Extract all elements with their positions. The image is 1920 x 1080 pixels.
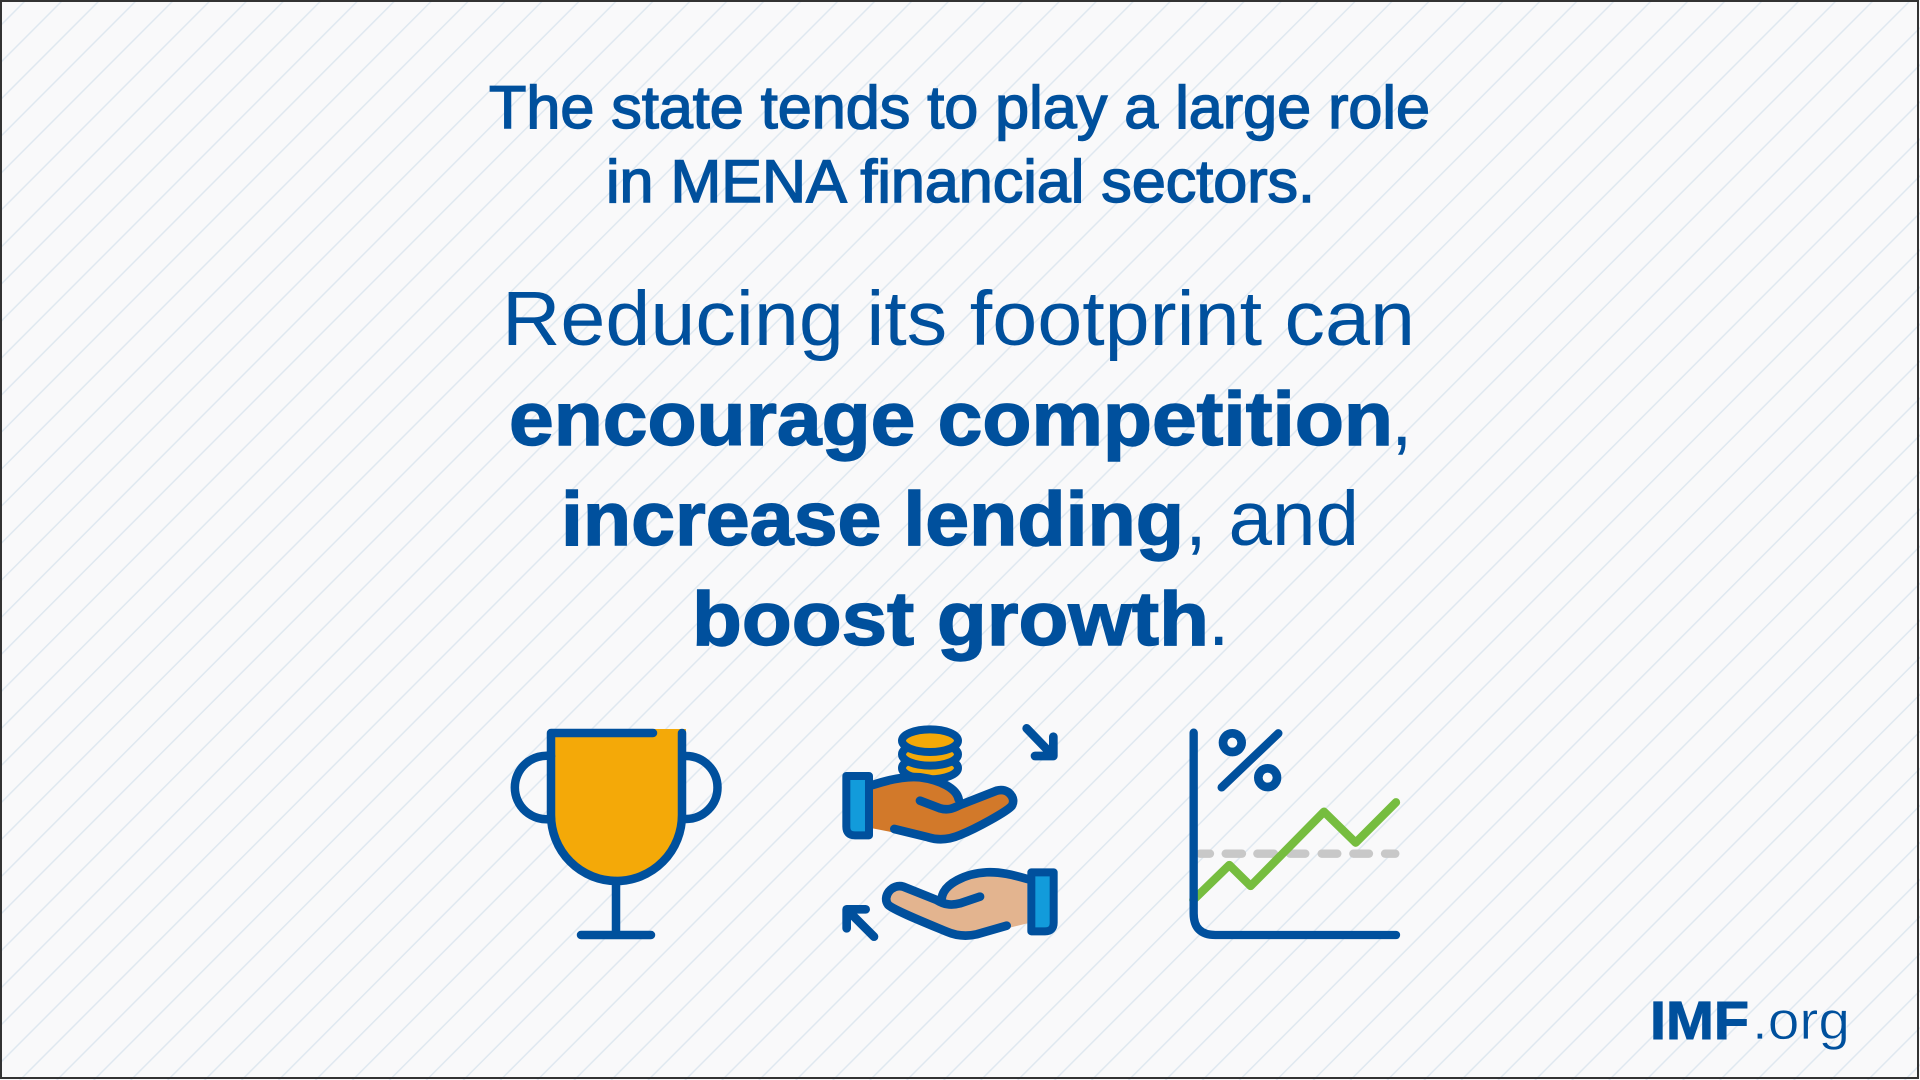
main message text: , and [1185,476,1359,562]
logo: IMF.org [1650,991,1850,1051]
main message text: . [1208,576,1229,662]
icon: rising percent line chart [1193,733,1396,935]
main message text: Reducing its footprint can [502,276,1415,362]
dashed reference line [1200,841,1395,866]
coin stack [902,729,958,779]
main message text: boost growth [692,577,1209,662]
icon: trophy [515,729,718,935]
heading: state role in MENA financial sectors: in MENA financial sectors. [606,148,1315,215]
main message text [502,276,1415,662]
icon: hands exchanging coins [846,728,1054,937]
axes [1194,733,1396,935]
arrow: down right [1027,728,1053,756]
main message text: increase lending [561,477,1184,562]
arrow: up left [847,909,874,937]
logo: IMF.org: IMF [1650,991,1749,1051]
upper hand giving coins [846,776,1013,839]
heading: state role in MENA financial sectors: The state tends to play a large role [489,74,1430,141]
main message text: encourage competition [509,377,1393,462]
main message text: , [1391,376,1412,462]
percent sign [1222,733,1278,787]
heading: state role in MENA financial sectors [489,74,1430,215]
green trend line [1193,802,1396,900]
lower hand receiving [886,872,1054,936]
logo: IMF.org: .org [1752,991,1850,1051]
